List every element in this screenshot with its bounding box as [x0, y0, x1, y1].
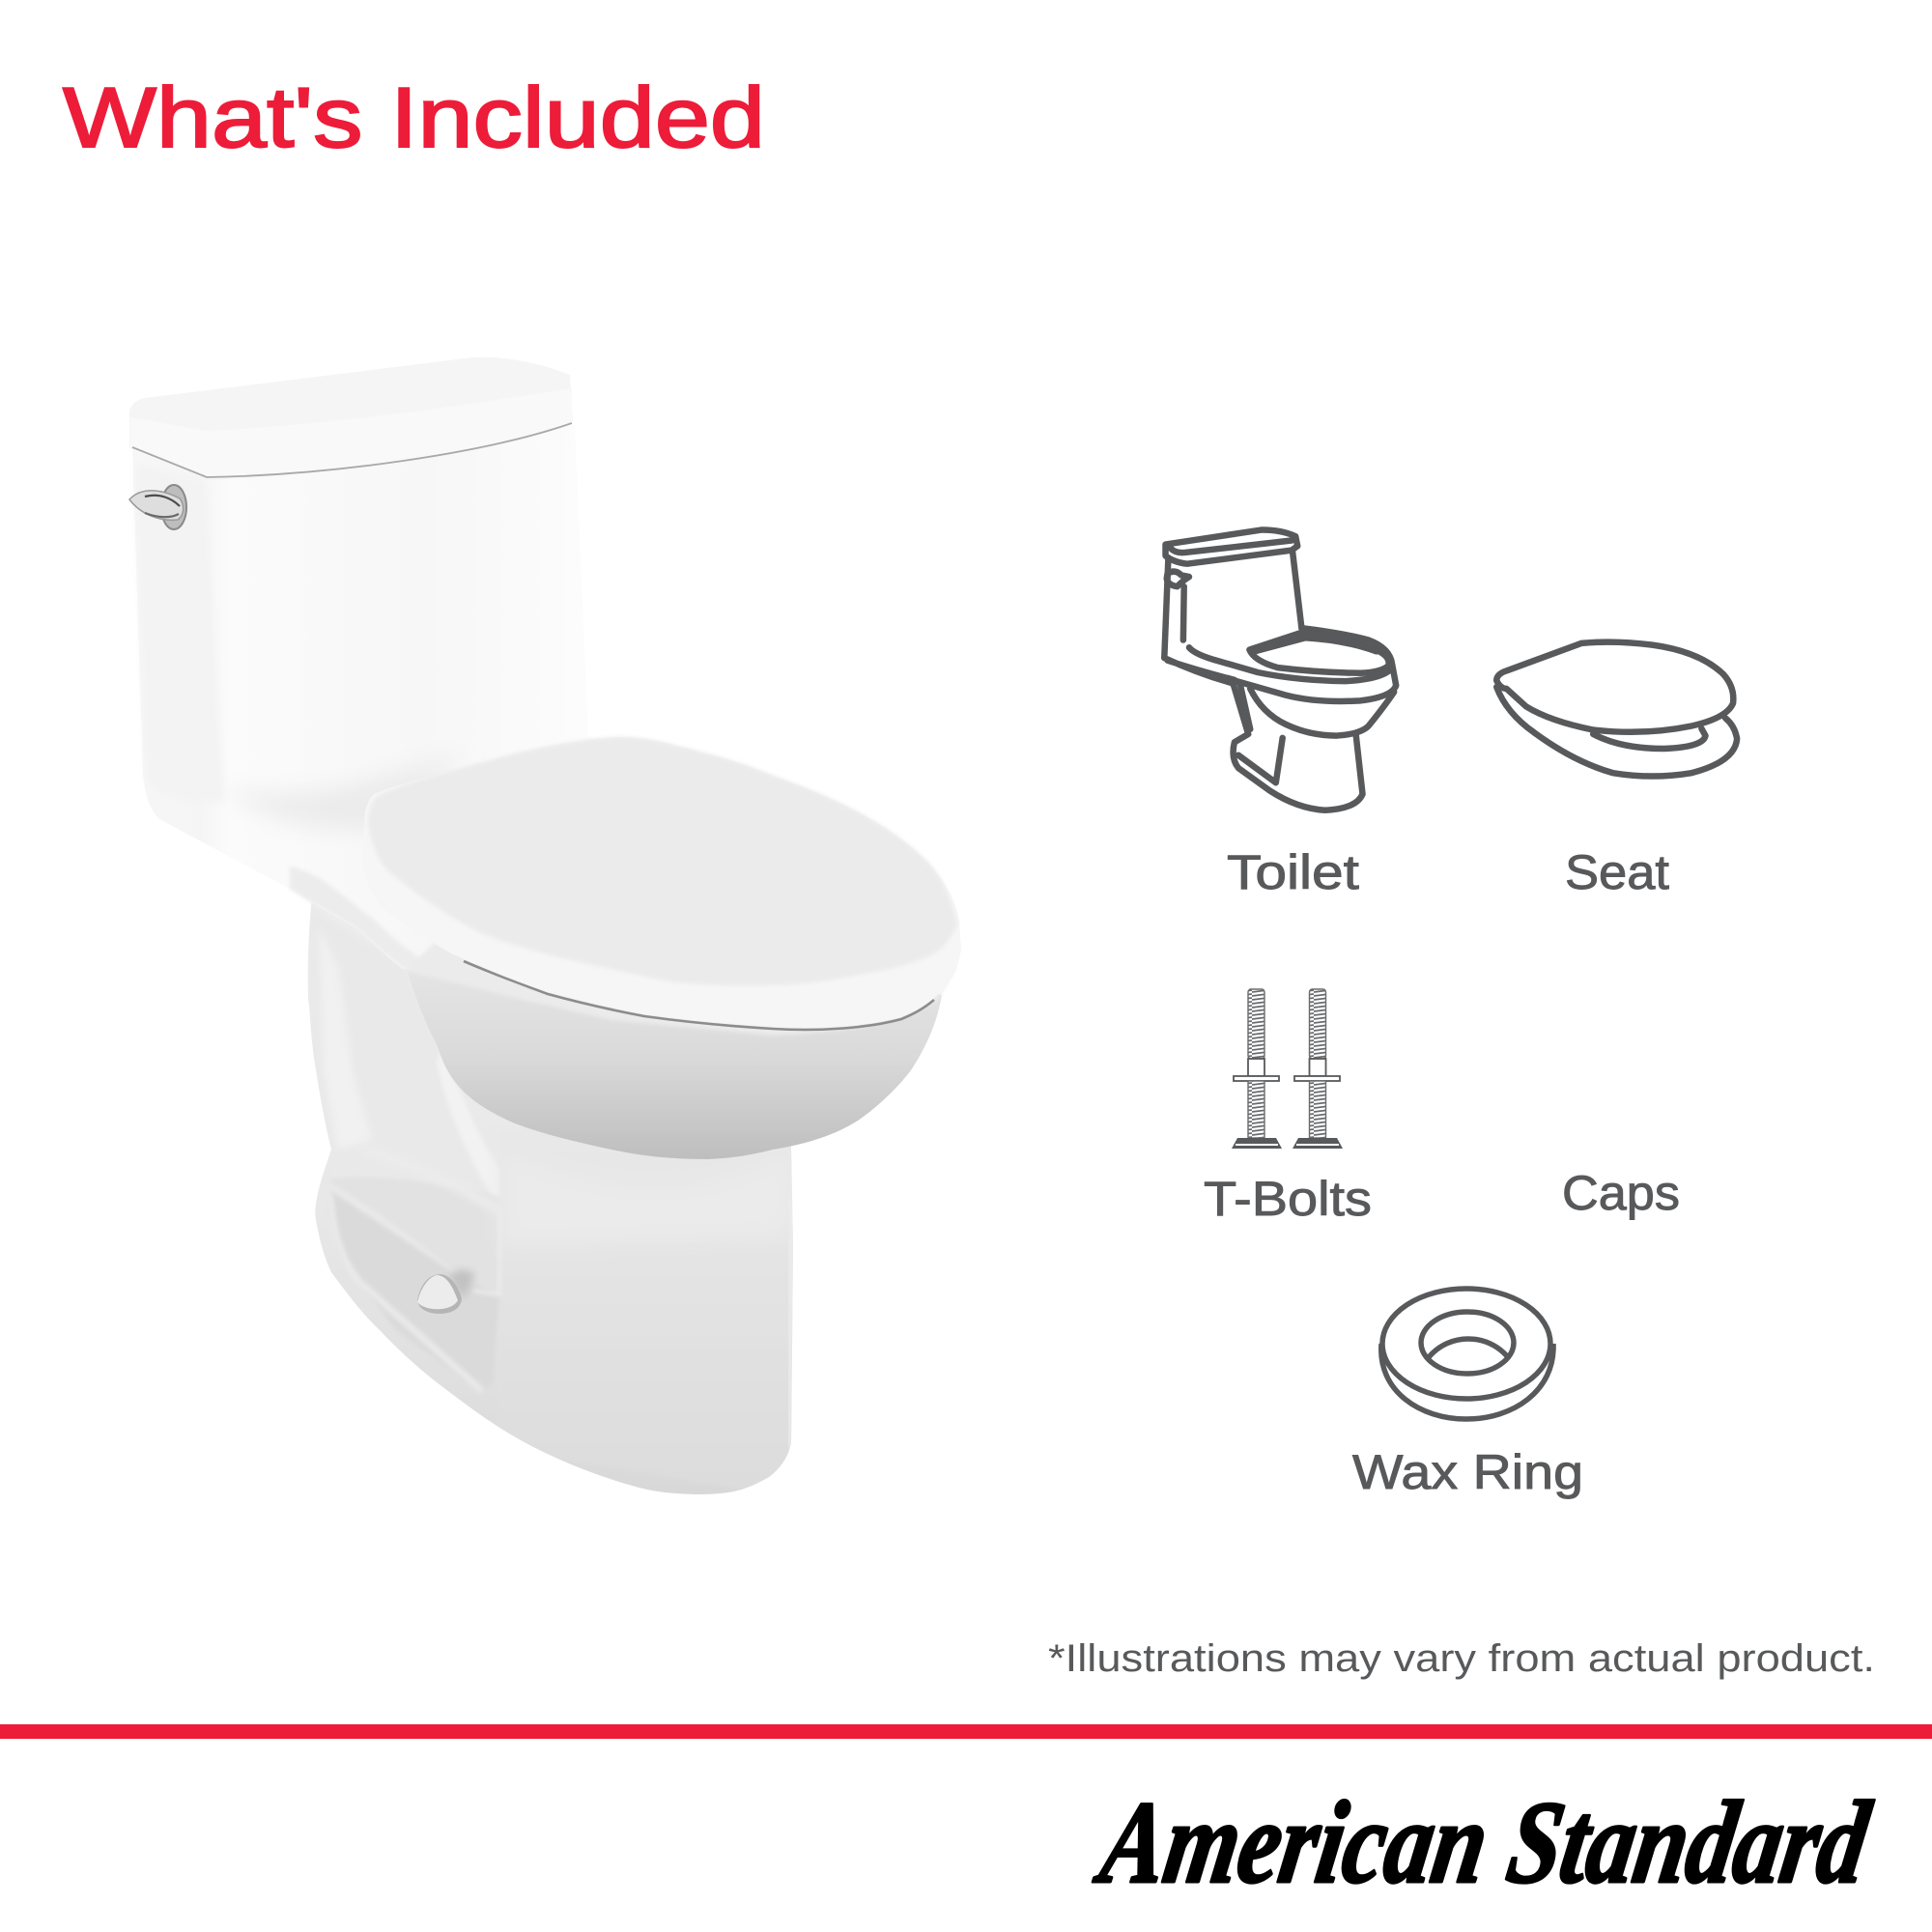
seat top surface	[368, 737, 957, 985]
seat lid	[362, 737, 961, 1030]
seat rim	[362, 737, 961, 1028]
label: T-Bolts: T-Bolts	[1204, 1172, 1372, 1226]
toilet pedestal	[307, 898, 793, 1497]
footnote: *Illustrations may vary from actual product.	[1048, 1637, 1875, 1680]
red divider bar	[0, 1724, 1932, 1739]
back column	[307, 903, 502, 1294]
main pedestal column	[497, 1130, 793, 1497]
bolt right	[1293, 989, 1343, 1149]
label: Wax Ring: Wax Ring	[1352, 1445, 1583, 1499]
label: Toilet: Toilet	[1227, 845, 1359, 899]
label: Caps: Caps	[1562, 1166, 1680, 1220]
light band beside bowl	[440, 1061, 491, 1180]
bolt left	[1232, 989, 1282, 1149]
seat shadow line	[464, 961, 934, 1030]
tank lid	[129, 357, 573, 480]
title: What's Included	[63, 70, 765, 165]
icon: seat line drawing	[1496, 642, 1737, 777]
flush handle	[129, 485, 186, 529]
tank and shelf	[132, 425, 618, 976]
bolt cap on base	[417, 1274, 462, 1314]
base platform	[333, 1194, 497, 1329]
tank side panel shade	[135, 464, 224, 802]
bowl rim band	[406, 942, 956, 1036]
icon: T-bolts	[1232, 989, 1343, 1149]
product photo: one-piece toilet	[129, 357, 961, 1497]
base rim highlight	[330, 1198, 480, 1389]
label: Seat: Seat	[1565, 845, 1669, 899]
shelf shading	[224, 753, 464, 831]
shelf underside band	[290, 867, 435, 970]
toilet bowl	[406, 927, 942, 1159]
icon: wax ring	[1381, 1289, 1553, 1419]
icon: toilet line drawing	[1164, 529, 1396, 810]
